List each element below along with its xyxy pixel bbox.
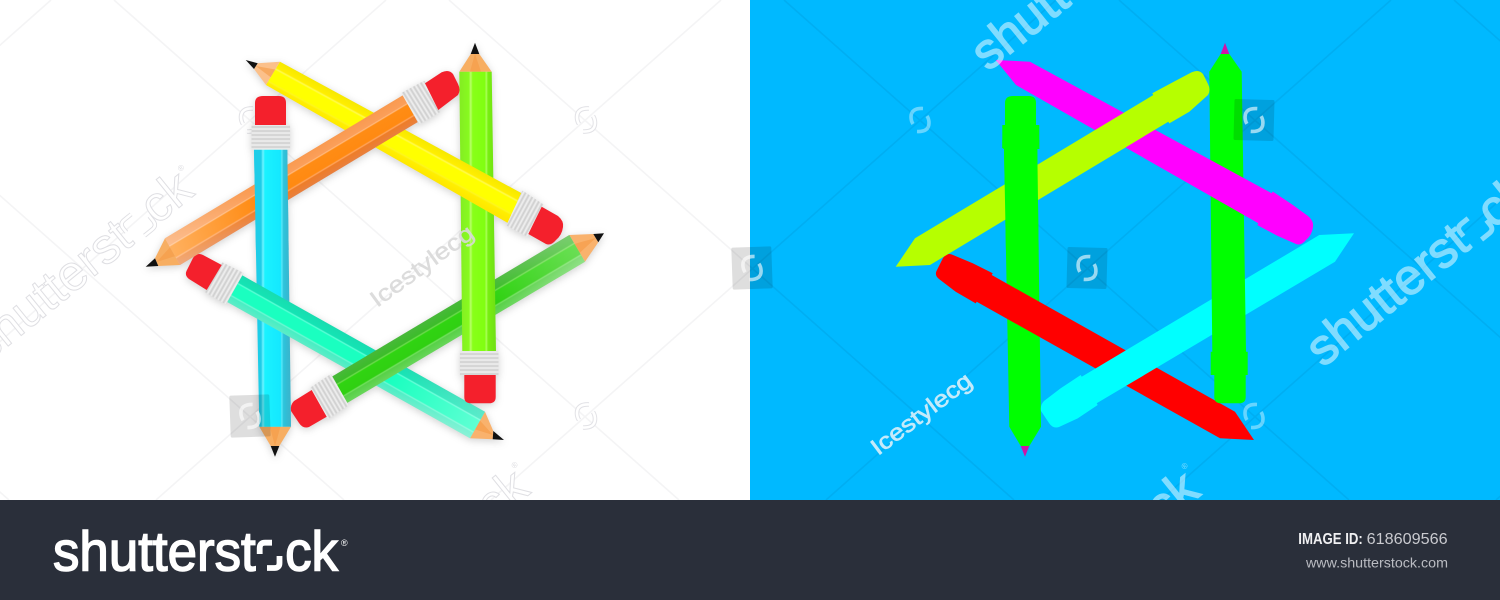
panel: blue mask background	[750, 0, 1500, 500]
logo: shutterstock: ®	[341, 538, 348, 548]
pencil: dark green	[291, 233, 604, 428]
pencil: yellow	[246, 60, 563, 244]
silhouette: magenta	[996, 60, 1313, 244]
illustration: colour mask silhouettes of the pencil star	[896, 43, 1354, 457]
watermark: shutterstock left: ®	[176, 163, 186, 173]
pencil: orange	[146, 71, 459, 267]
website: www.shutterstock.com	[1305, 554, 1448, 570]
image id: IMAGE ID:	[1298, 531, 1363, 548]
image id	[1298, 531, 1448, 548]
watermark: logo fragment bottom: ®	[1180, 461, 1190, 472]
image id: 618609566	[1367, 531, 1448, 548]
pencil: lime	[459, 43, 498, 403]
logo: shutterstock: shutterstock	[53, 520, 339, 582]
footer bar	[0, 500, 1500, 600]
icon: watermark square on panel seam	[731, 246, 773, 290]
silhouette: left green crossing over yellow-green	[1002, 140, 1040, 250]
icon: watermark mark lower right	[1245, 404, 1263, 428]
icon: watermark mark top right	[577, 108, 595, 132]
icon: watermark square bottom left	[229, 394, 271, 438]
illustration: star of six coloured pencils	[146, 43, 604, 457]
watermarks: left panel	[0, 108, 595, 533]
watermark: logo fragment bottom: ck	[465, 457, 540, 533]
icon: watermark square top right	[1233, 99, 1275, 141]
panel: white render background	[0, 0, 750, 500]
watermark: contributor name left: Icestylecg	[365, 219, 479, 312]
icon: watermark mark upper left	[911, 108, 929, 132]
watermark: logo fragment bottom: ®	[510, 460, 520, 471]
pencil: cyan crossing over orange	[254, 150, 289, 250]
silhouette: cyan	[1041, 233, 1354, 428]
silhouette: left vertical green	[1002, 96, 1041, 457]
watermark: contributor name right: Icestylecg	[865, 367, 977, 460]
silhouette: red	[936, 254, 1254, 440]
watermark: logo fragment bottom: ck	[1135, 459, 1210, 535]
silhouette: right vertical green	[1209, 43, 1248, 403]
pencil: cyan	[252, 96, 291, 457]
icon: watermark mark behind cyan pencil	[241, 108, 259, 132]
silhouette: yellow-green	[896, 71, 1210, 267]
icon: watermark mark bottom right	[577, 404, 595, 428]
pencil: teal	[186, 254, 504, 440]
watermarks: right panel	[865, 0, 1500, 535]
icon: watermark square centre	[1066, 247, 1108, 289]
